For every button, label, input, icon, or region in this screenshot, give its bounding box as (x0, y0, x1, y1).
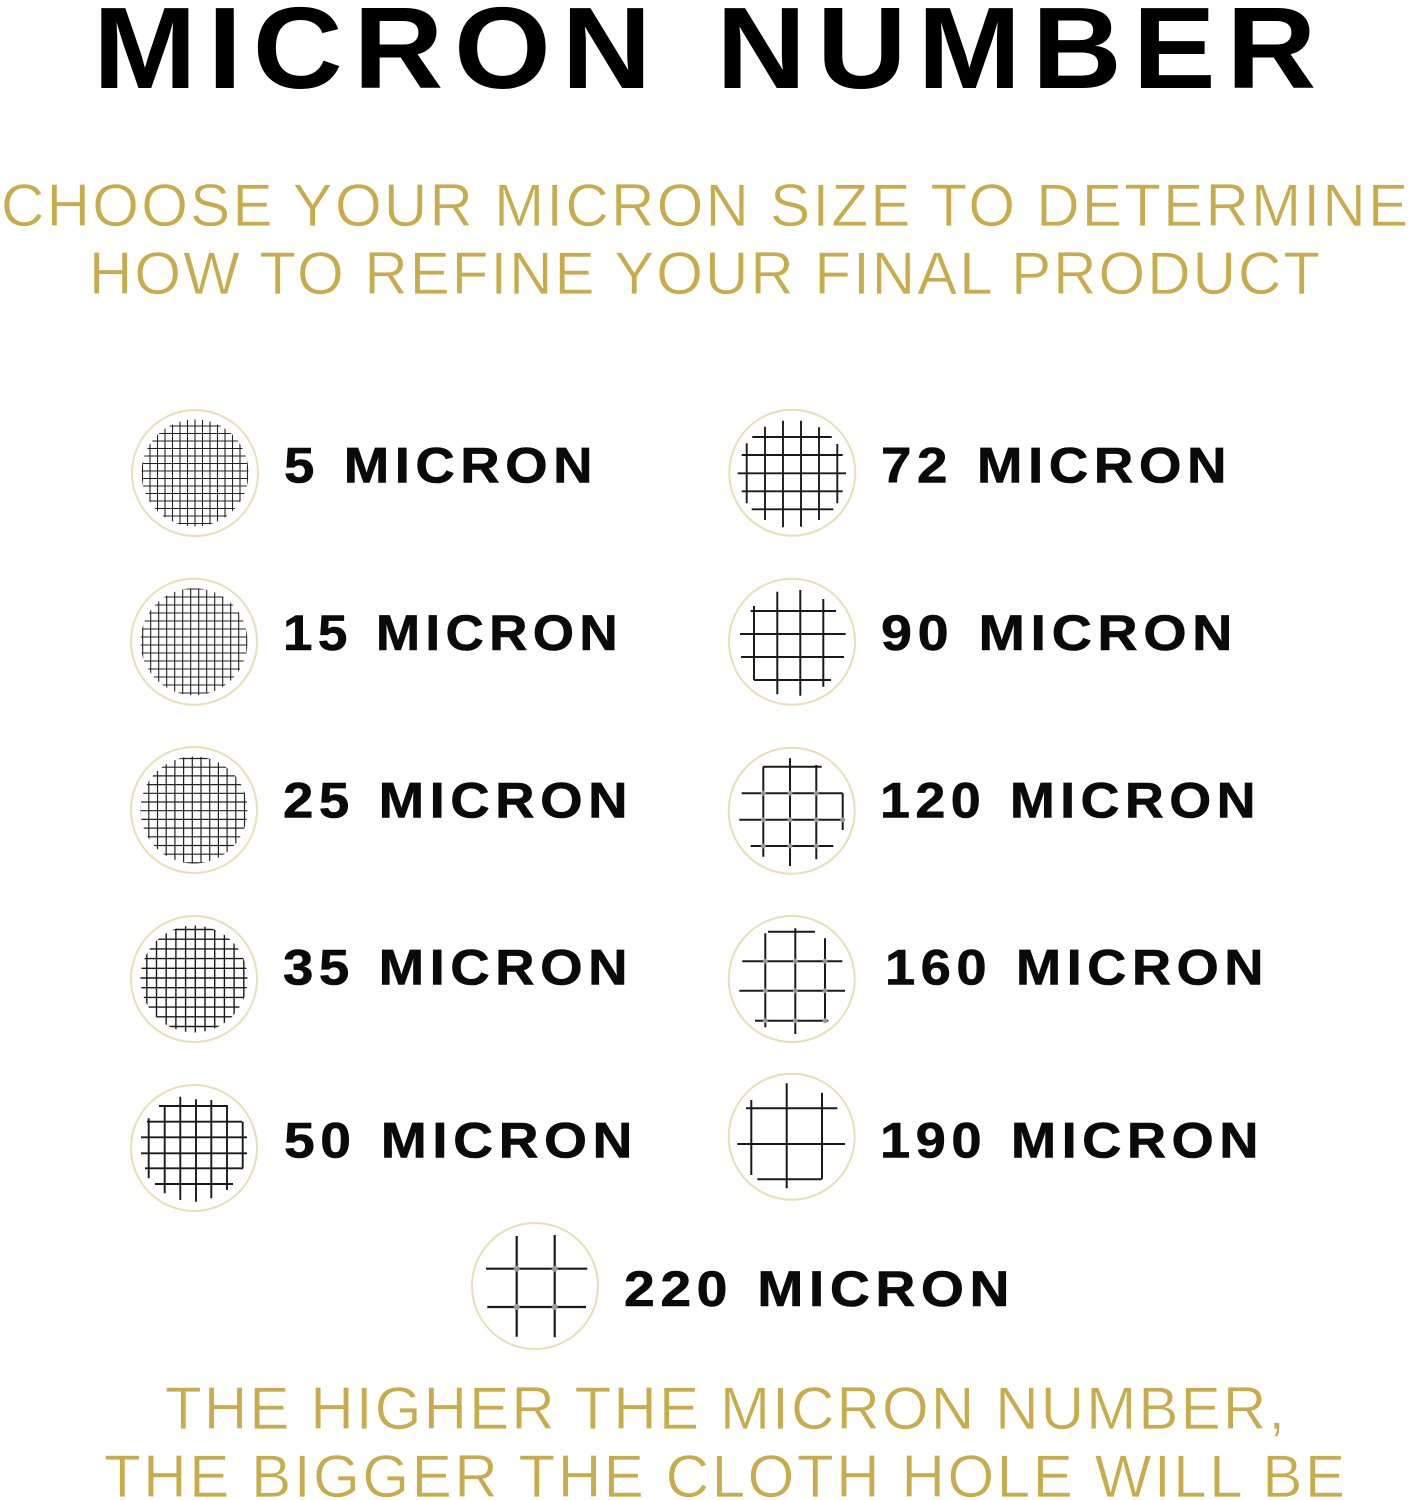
icon: 120 micron mesh (729, 748, 855, 874)
item: 190 micron: 190 MICRON (880, 1112, 1264, 1168)
subtitle (1, 172, 1408, 307)
item: 220 micron (472, 1223, 1015, 1349)
item: 190 micron (729, 1074, 1264, 1200)
item: 90 micron: 90 MICRON (881, 605, 1238, 661)
icon: 25 micron mesh (131, 747, 257, 873)
icon: 90 micron mesh (729, 579, 855, 705)
icon: 35 micron mesh (131, 916, 257, 1042)
icon: 5 micron mesh (132, 410, 258, 536)
item: 160 micron: 160 MICRON (885, 940, 1269, 996)
subtitle: CHOOSE YOUR MICRON SIZE TO DETERMINE (1, 172, 1408, 239)
footer note: THE HIGHER THE MICRON NUMBER, (165, 1375, 1285, 1442)
item: 15 micron: 15 MICRON (283, 605, 623, 661)
item: 72 micron (729, 410, 1232, 536)
item: 35 micron (131, 916, 633, 1042)
item: 120 micron (729, 748, 1261, 874)
item: 5 micron (132, 410, 598, 536)
item: 15 micron (131, 579, 623, 705)
item: 25 micron (131, 747, 633, 873)
item: 72 micron: 72 MICRON (881, 438, 1232, 494)
item: 50 micron (131, 1085, 638, 1211)
icon: 72 micron mesh (729, 410, 855, 536)
item: 220 micron: 220 MICRON (624, 1261, 1015, 1317)
item: 5 micron: 5 MICRON (284, 438, 598, 494)
icon: 160 micron mesh (729, 916, 855, 1042)
icon: 15 micron mesh (131, 579, 257, 705)
item: 120 micron: 120 MICRON (880, 772, 1261, 828)
item: 25 micron: 25 MICRON (283, 772, 633, 828)
footer note (104, 1375, 1345, 1500)
subtitle: HOW TO REFINE YOUR FINAL PRODUCT (89, 240, 1320, 307)
item: 160 micron (729, 916, 1269, 1042)
icon: 220 micron mesh (472, 1223, 598, 1349)
icon: 50 micron mesh (131, 1085, 257, 1211)
icon: 190 micron mesh (729, 1074, 855, 1200)
item: 35 micron: 35 MICRON (283, 940, 633, 996)
item: 50 micron: 50 MICRON (284, 1112, 638, 1168)
item: 90 micron (729, 579, 1238, 705)
